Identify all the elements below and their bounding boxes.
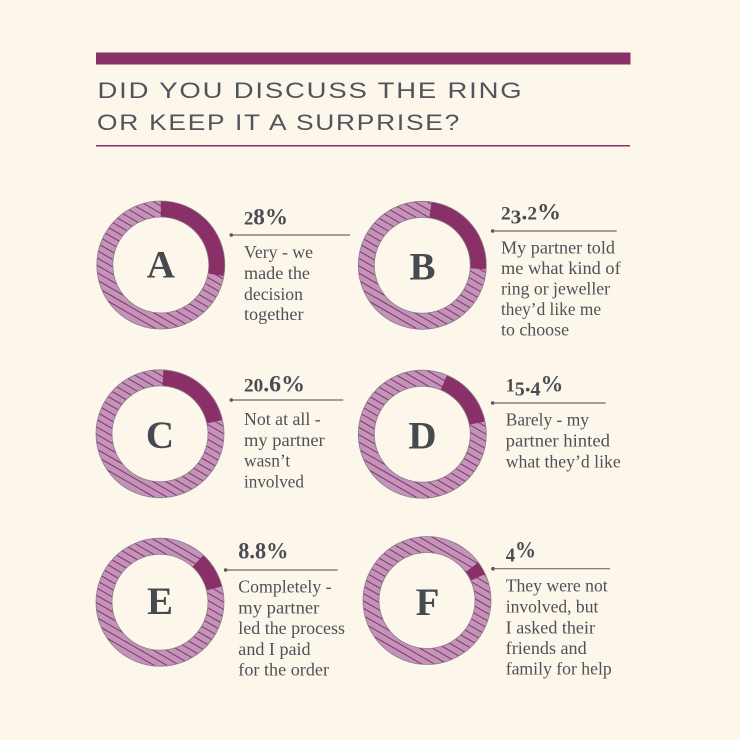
donut chart E: 8.8% [96, 538, 224, 667]
description C: my partner [244, 430, 325, 450]
leader line F [491, 567, 610, 570]
description F: friends and [506, 638, 587, 658]
description C [244, 409, 325, 492]
panel: D [358, 370, 620, 499]
description E: led the process [238, 618, 345, 638]
description A [244, 242, 313, 324]
description A: made the [244, 263, 310, 283]
panel: C [96, 369, 344, 498]
value D: 1 [506, 377, 515, 397]
title [97, 78, 524, 135]
leader line C [230, 398, 343, 402]
top bar [96, 52, 630, 64]
title: OR KEEP IT A SURPRISE? [97, 110, 461, 135]
description F: They were not [506, 576, 608, 596]
value A: 28% [244, 204, 288, 229]
panel: F [363, 523, 612, 678]
description F [506, 576, 612, 678]
value B: . [521, 200, 527, 224]
title rule [96, 145, 630, 146]
description B: to choose [501, 320, 569, 340]
description E: my partner [238, 597, 319, 617]
description F: family for help [506, 658, 612, 678]
letter B: B [409, 245, 436, 288]
value F: % [515, 537, 536, 562]
value B: 2% [527, 200, 560, 224]
letter C: C [146, 414, 174, 457]
value C: 20.6% [244, 372, 305, 397]
value B: 3 [511, 206, 521, 228]
leader line B [491, 229, 617, 233]
leader line A [230, 233, 350, 237]
panel: A [96, 200, 350, 330]
value F: 4 [506, 544, 515, 566]
description E: and I paid [238, 639, 311, 659]
description C: Not at all - [244, 409, 321, 429]
description D: what they’d like [506, 451, 621, 471]
letter A: A [147, 244, 175, 287]
letter E: E [147, 580, 173, 623]
description E [238, 576, 345, 680]
description E: Completely - [238, 576, 332, 596]
description D: partner hinted [506, 431, 610, 451]
description C: involved [244, 472, 304, 492]
donut chart B: 23.2% [358, 200, 487, 330]
leader line D [491, 401, 606, 405]
donut chart C: 20.6% [96, 369, 224, 498]
donut chart D: 15.4% [358, 370, 487, 499]
value D: % [541, 372, 563, 397]
value D: 5 [515, 379, 525, 401]
description B: My partner told [501, 237, 615, 257]
title: DID YOU DISCUSS THE RING [98, 78, 524, 103]
description A: together [244, 304, 304, 324]
description F: involved, but [506, 596, 598, 616]
description C: wasn’t [244, 451, 290, 471]
letter D: D [408, 414, 437, 457]
value E: 8.8% [238, 538, 288, 563]
leader line E [224, 568, 338, 572]
donut chart F: 4% [362, 536, 492, 665]
description A: Very - we [244, 242, 313, 262]
description B: ring or jeweller [501, 278, 610, 298]
value D: . [525, 372, 531, 397]
description B [501, 237, 621, 340]
letter F: F [416, 581, 439, 624]
description B: me what kind of [501, 258, 621, 278]
description A: decision [244, 284, 303, 304]
description F: I asked their [506, 617, 595, 637]
description D: Barely - my [506, 410, 589, 430]
description B: they’d like me [501, 299, 601, 319]
value D: 4 [531, 379, 541, 401]
panel: B [358, 200, 621, 336]
panel: E [96, 538, 344, 676]
description E: for the order [238, 660, 329, 680]
donut chart A: 28% [96, 200, 226, 330]
description D [506, 410, 621, 471]
value B: 2 [501, 204, 511, 224]
